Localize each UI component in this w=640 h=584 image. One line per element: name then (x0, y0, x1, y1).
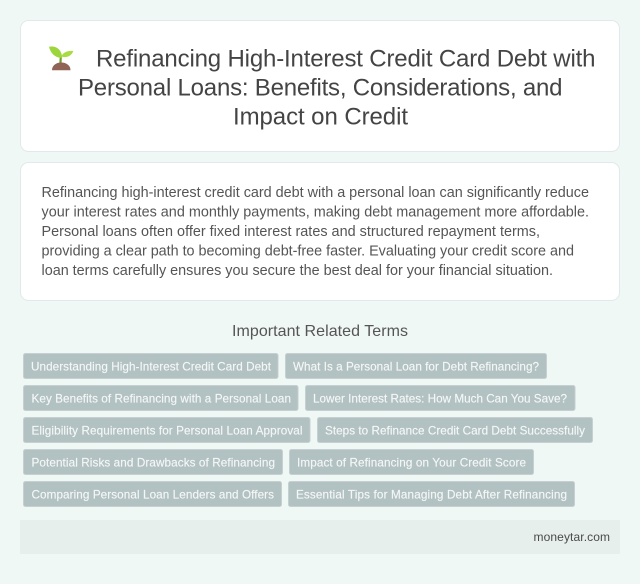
icon: seedling (49, 47, 73, 70)
tag: What Is a Personal Loan for Debt Refinancing? (293, 360, 539, 374)
panel: title card (20, 20, 620, 152)
summary text: Personal loans often offer fixed interest rates and structured repayment terms, (42, 224, 540, 240)
tag (288, 482, 574, 506)
tag: Lower Interest Rates: How Much Can You Save? (313, 392, 567, 406)
tag: Key Benefits of Refinancing with a Personal Loan (32, 392, 291, 406)
tag: Comparing Personal Loan Lenders and Offers (32, 488, 274, 502)
heading: related terms: Important Related Terms (232, 323, 408, 340)
tag: Essential Tips for Managing Debt After Refinancing (296, 488, 567, 502)
tag (24, 354, 278, 378)
title text: Personal Loans: Benefits, Considerations, and (78, 74, 562, 102)
tag (24, 450, 282, 474)
panel: summary card (20, 162, 620, 300)
summary text: loan terms carefully ensures you secure the best deal for your financial situation. (42, 263, 553, 279)
tag: Understanding High-Interest Credit Card Debt (31, 360, 272, 374)
tag (24, 418, 310, 442)
tag (306, 386, 575, 410)
summary text: Refinancing high-interest credit card debt with a personal loan can significantly reduce (42, 185, 589, 201)
footer bar (20, 520, 620, 554)
tag: Impact of Refinancing on Your Credit Score (297, 456, 526, 470)
tag: Eligibility Requirements for Personal Loan Approval (32, 424, 302, 438)
footer site name: moneytar.com (534, 530, 610, 544)
title text: Refinancing High-Interest Credit Card Debt with (96, 46, 596, 72)
tag: Steps to Refinance Credit Card Debt Successfully (325, 424, 585, 438)
summary text (42, 185, 589, 279)
summary text: providing a clear path to becoming debt-free faster. Evaluating your credit score and (42, 244, 574, 260)
tag (24, 482, 282, 506)
summary text: your interest rates and monthly payments, making debt management more affordable. (42, 204, 589, 220)
related terms tags (24, 354, 592, 506)
tag (286, 354, 546, 378)
title text: Impact on Credit (233, 104, 408, 130)
tag: Potential Risks and Drawbacks of Refinancing (32, 456, 275, 470)
tag (290, 450, 534, 474)
title text (78, 46, 596, 130)
tag (24, 386, 298, 410)
tag (318, 418, 592, 442)
